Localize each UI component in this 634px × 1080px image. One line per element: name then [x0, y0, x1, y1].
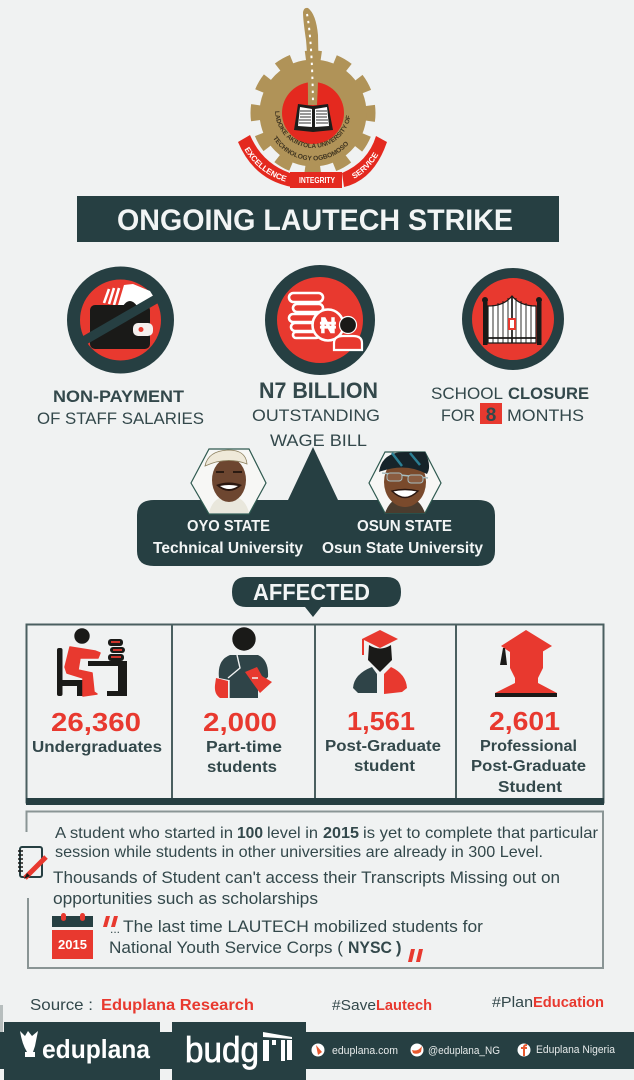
text: transcripts and scholarships: opportunities such as scholarships	[53, 890, 318, 908]
panel: alternative state universities: Osun State University	[322, 540, 483, 557]
text: transcripts and scholarships	[53, 869, 560, 908]
stat: professional post-graduate students: Post-Graduate	[471, 758, 586, 775]
title banner	[77, 196, 559, 242]
stat: post-graduate students: Post-Graduate	[325, 738, 441, 755]
text: student session delay: 2015	[323, 825, 359, 842]
text: student session delay: A student who started in	[55, 825, 233, 842]
icon: LAUTECH university logo: EXCELLENCE	[244, 146, 287, 182]
text: non-payment of staff salaries: OF STAFF SALARIES	[37, 409, 204, 428]
icon: closing quote marks	[408, 949, 423, 962]
hashtag: PlanEducation	[492, 994, 604, 1011]
footer band	[0, 1005, 634, 1080]
stat: part-time students: students	[207, 759, 277, 776]
icon: notebook and pencil	[18, 847, 46, 879]
stat: professional post-graduate students: Student	[498, 779, 563, 796]
text: N7 billion outstanding wage bill: OUTSTANDING	[252, 406, 380, 425]
photo: Oyo state portrait	[191, 449, 266, 514]
photo: Osun state portrait	[369, 452, 441, 513]
text: non-payment of staff salaries	[37, 387, 204, 428]
stat: professional post-graduate students	[471, 706, 586, 796]
stat: post-graduate students: 1,561	[347, 706, 415, 736]
panel: alternative state universities: Technical University	[153, 540, 303, 557]
heading: affected: AFFECTED	[253, 579, 370, 605]
text: last NYSC mobilization: The last time LAUTECH mobilized students for	[123, 918, 484, 936]
text: N7 billion outstanding wage bill: WAGE BILL	[270, 431, 367, 450]
icon: post-graduate in cap	[353, 630, 407, 694]
source line: Source :	[30, 997, 93, 1014]
text: school closure for 8 months: 8	[486, 405, 496, 426]
icon: 2015 calendar: 2015	[58, 937, 87, 952]
text: student session delay: level in	[267, 825, 318, 842]
icon: part-time student	[215, 627, 272, 698]
stat: post-graduate students: student	[354, 758, 416, 775]
text: school closure for 8 months: SCHOOL	[431, 384, 503, 403]
text: last NYSC mobilization: National Youth Service Corps (	[109, 939, 344, 957]
icon: opening quote marks	[103, 916, 118, 927]
stat: undergraduates: 26,360	[51, 707, 141, 737]
icon: student at desk	[57, 628, 127, 696]
icon: LAUTECH university logo: TECHNOLOGY OGBOMOSO	[274, 136, 348, 160]
hashtag: SaveLautech: Lautech	[376, 997, 432, 1014]
hashtag: PlanEducation: Education	[533, 994, 604, 1011]
icon: closed school gate	[467, 273, 559, 365]
icon: LAUTECH university logo: LADOKE AKINTOLA UNIVERSITY OF	[275, 111, 350, 148]
icon: 2015 calendar	[52, 913, 93, 959]
stat: part-time students	[203, 707, 282, 776]
logo: eduplana: eduplana	[42, 1034, 151, 1064]
panel: alternative state universities: OYO STATE	[187, 518, 270, 535]
heading: affected	[232, 577, 401, 617]
hashtag: SaveLautech	[332, 997, 432, 1014]
text: student session delay	[55, 825, 599, 861]
stat: undergraduates: Undergraduates	[32, 739, 162, 756]
source line	[30, 997, 254, 1014]
logo: budgIT: budg	[185, 1029, 259, 1070]
icon: naira coins and person: ₦	[320, 313, 336, 338]
social: facebook: Eduplana Nigeria	[536, 1044, 616, 1056]
stat: undergraduates	[32, 707, 162, 756]
panel: affected statistics table	[26, 624, 604, 805]
text: non-payment of staff salaries: NON-PAYMENT	[53, 387, 185, 406]
social: twitter: @eduplana_NG	[428, 1045, 500, 1057]
social: website	[312, 1044, 398, 1057]
text: student session delay: 100	[237, 825, 263, 842]
panel: alternative state universities: OSUN STATE	[357, 518, 452, 535]
icon: wallet with prohibition sign	[74, 273, 168, 367]
panel: alternative state universities	[137, 447, 495, 566]
text: last NYSC mobilization: ...	[110, 922, 120, 936]
stat: professional post-graduate students: Professional	[480, 738, 577, 755]
icon: naira coins and person	[271, 271, 369, 369]
title banner: ONGOING LAUTECH STRIKE	[117, 204, 513, 237]
panel: impact notes	[18, 812, 603, 968]
text: school closure for 8 months: FOR	[441, 406, 475, 425]
text: last NYSC mobilization: NYSC	[348, 939, 392, 957]
text: N7 billion outstanding wage bill: N7 BILLION	[259, 378, 378, 403]
text: school closure for 8 months	[431, 384, 589, 426]
hashtag: PlanEducation: #Plan	[492, 994, 533, 1011]
text: school closure for 8 months: MONTHS	[507, 406, 584, 425]
text: last NYSC mobilization: )	[396, 939, 402, 957]
text: student session delay: session while students in other universities are already in 300 Level.	[55, 844, 543, 861]
stat: post-graduate students	[325, 706, 441, 775]
text: transcripts and scholarships: Thousands of Student can't access their Transcripts Missing out on	[53, 869, 560, 887]
icon: professional graduate silhouette	[495, 630, 557, 697]
icon: LAUTECH university logo: SERVICE	[352, 152, 378, 178]
stat: part-time students: Part-time	[206, 739, 282, 756]
text: student session delay: is yet to complete that particular	[363, 825, 599, 842]
text: last NYSC mobilization	[109, 918, 484, 957]
stat: professional post-graduate students: 2,601	[489, 706, 560, 736]
text: N7 billion outstanding wage bill	[252, 378, 380, 450]
stat: part-time students: 2,000	[203, 707, 277, 737]
icon: LAUTECH university logo: INTEGRITY	[299, 176, 336, 185]
source line: Eduplana Research	[101, 997, 254, 1014]
text: school closure for 8 months: CLOSURE	[508, 384, 589, 403]
social: website: eduplana.com	[332, 1045, 398, 1057]
hashtag: SaveLautech: #Save	[332, 997, 376, 1014]
icon: LAUTECH university logo	[238, 8, 387, 188]
social: twitter	[410, 1044, 500, 1057]
